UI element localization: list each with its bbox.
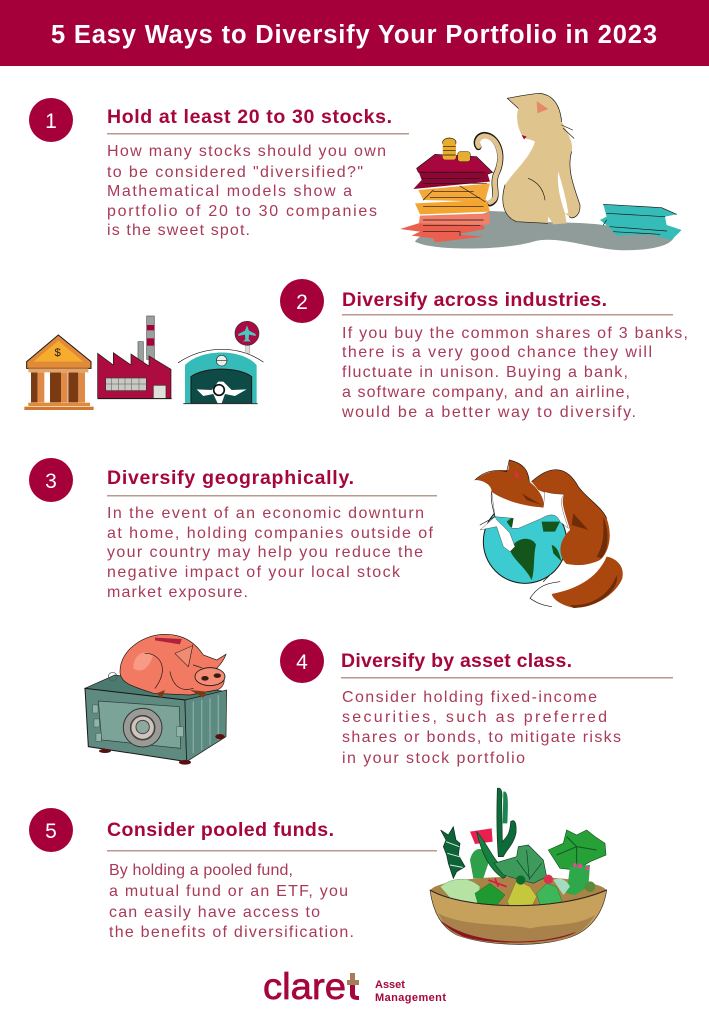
body text 2: a software company, and an airline, bbox=[342, 384, 630, 401]
heading 5: Consider pooled funds. bbox=[107, 819, 334, 841]
body text 1: How many stocks should you own bbox=[107, 143, 386, 160]
fox body bbox=[532, 470, 610, 565]
logo: Claret Asset Management: Management bbox=[375, 992, 446, 1004]
body text 4 bbox=[342, 689, 621, 767]
body text 1 bbox=[107, 143, 386, 239]
fox head and neck bbox=[480, 492, 568, 552]
fox belly and white tail tip bbox=[530, 557, 607, 598]
number badge 4 bbox=[280, 639, 324, 683]
number badge 2 bbox=[280, 279, 324, 323]
body text 2: fluctuate in unison. Buying a bank, bbox=[342, 364, 628, 381]
title banner bbox=[0, 0, 709, 66]
body text 4: securities, such as preferred bbox=[342, 709, 607, 726]
bowl front bbox=[430, 890, 607, 944]
body text 1: portfolio of 20 to 30 companies bbox=[107, 203, 377, 220]
illustration: cat with stacks of papers and coins bbox=[400, 93, 682, 250]
body text 2: there is a very good chance they will bbox=[342, 344, 652, 361]
panel: step 5 pooled funds bbox=[29, 788, 607, 944]
body text 1: Mathematical models show a bbox=[107, 183, 352, 200]
panel: step 2 industries bbox=[24, 279, 688, 421]
body text 3: at home, holding companies outside of bbox=[107, 525, 434, 542]
body text 1: to be considered "diversified?" bbox=[107, 164, 363, 181]
number badge 3: 3 bbox=[45, 470, 57, 493]
body text 1: is the sweet spot. bbox=[107, 222, 250, 239]
heading 4: Diversify by asset class. bbox=[341, 650, 572, 672]
number badge 5 bbox=[29, 808, 73, 852]
body text 2: would be a better way to diversify. bbox=[341, 404, 636, 421]
number badge 1 bbox=[29, 98, 73, 142]
body text 3: In the event of an economic downturn bbox=[107, 505, 424, 522]
heading 1: Hold at least 20 to 30 stocks. bbox=[107, 106, 392, 128]
illustration: fox curled around a globe bbox=[475, 460, 623, 608]
body text 3: negative impact of your local stock bbox=[107, 564, 401, 581]
logo: Claret Asset Management bbox=[263, 966, 446, 1007]
icon: bank: $ bbox=[55, 347, 62, 359]
body text 3: market exposure. bbox=[107, 584, 248, 601]
number badge 1: 1 bbox=[45, 110, 57, 133]
number badge 5: 5 bbox=[45, 820, 57, 843]
body text 3 bbox=[107, 505, 434, 601]
body text 5: By holding a pooled fund, bbox=[109, 862, 293, 879]
icon: hangar with airplane and sign bbox=[178, 321, 263, 404]
heading 3: Diversify geographically. bbox=[107, 467, 354, 489]
icon: factory bbox=[98, 316, 172, 399]
body text 2: If you buy the common shares of 3 banks, bbox=[342, 325, 688, 342]
number badge 3 bbox=[29, 458, 73, 502]
logo: Claret Asset Management: clare bbox=[263, 966, 346, 1007]
title banner: 5 Easy Ways to Diversify Your Portfolio in 2023 bbox=[51, 21, 657, 49]
body text 5: a mutual fund or an ETF, you bbox=[109, 883, 348, 900]
panel: step 4 asset class bbox=[85, 634, 673, 767]
heading 2: Diversify across industries. bbox=[342, 289, 607, 311]
icon: bank bbox=[24, 335, 94, 410]
body text 4: in your stock portfolio bbox=[342, 750, 525, 767]
panel: step 1 stocks bbox=[29, 93, 682, 250]
illustration: bank, factory and airplane hangar bbox=[24, 316, 263, 410]
body text 5 bbox=[109, 862, 354, 941]
body text 4: shares or bonds, to mitigate risks bbox=[342, 729, 621, 746]
number badge 4: 4 bbox=[296, 651, 308, 674]
body text 3: your country may help you reduce the bbox=[107, 544, 423, 561]
body text 5: can easily have access to bbox=[109, 904, 320, 921]
panel: step 3 geography bbox=[29, 458, 623, 608]
body text 2 bbox=[341, 325, 688, 421]
number badge 2: 2 bbox=[296, 291, 308, 314]
illustration: succulent bowl bbox=[430, 788, 607, 944]
fox tail bbox=[552, 557, 623, 608]
cacti and succulents bbox=[440, 788, 606, 910]
bowl interior bbox=[430, 877, 607, 907]
body text 5: the benefits of diversification. bbox=[109, 924, 354, 941]
illustration: sleeping piggy bank on a safe bbox=[85, 634, 227, 765]
logo: Claret Asset Management: Asset bbox=[375, 979, 405, 991]
body text 4: Consider holding fixed-income bbox=[342, 689, 597, 706]
